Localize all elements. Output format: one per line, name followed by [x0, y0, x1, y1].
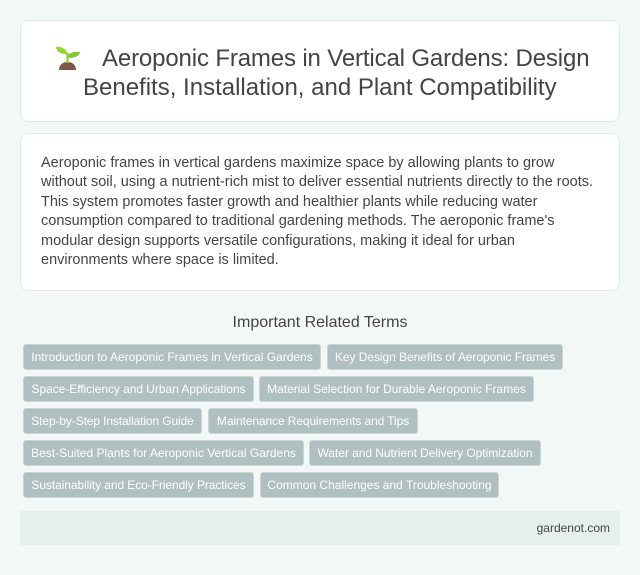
tag list: Material Selection for Durable Aeroponic Frames — [267, 382, 526, 396]
tag list — [23, 344, 563, 498]
tag list: Water and Nutrient Delivery Optimization — [318, 446, 532, 460]
text: summary paragraph: Aeroponic frames in vertical gardens maximize space by allowing plants to grow — [41, 155, 554, 171]
tag list: Best-Suited Plants for Aeroponic Vertical Gardens — [31, 446, 296, 460]
text: summary paragraph — [41, 155, 593, 268]
heading: related terms: Important Related Terms — [233, 314, 407, 331]
text: summary paragraph: consumption compared to traditional gardening methods. The aeroponic frame's — [41, 213, 555, 229]
panel: summary card — [20, 133, 620, 291]
tag list: Common Challenges and Troubleshooting — [267, 478, 492, 492]
footer source text: gardenot.com — [537, 521, 610, 535]
heading: title line 1: Aeroponic Frames in Vertical Gardens: Design — [102, 45, 589, 72]
tag list: Space-Efficiency and Urban Applications — [32, 382, 245, 396]
tag list: Step-by-Step Installation Guide — [31, 414, 194, 428]
tag list: Sustainability and Eco-Friendly Practices — [31, 478, 246, 492]
footer bar — [20, 511, 620, 545]
panel: title card — [20, 20, 620, 122]
tag list: Key Design Benefits of Aeroponic Frames — [335, 350, 555, 364]
text: summary paragraph: without soil, using a nutrient-rich mist to deliver essential nutrients directly to the roots. — [41, 174, 593, 190]
text: summary paragraph: modular design supports versatile configurations, making it ideal for urban — [41, 233, 515, 249]
icon: seedling — [56, 46, 80, 70]
tag list: Introduction to Aeroponic Frames in Vertical Gardens — [31, 350, 313, 364]
text: summary paragraph: environments where space is limited. — [41, 252, 279, 268]
heading: title line 2: Benefits, Installation, and Plant Compatibility — [83, 74, 557, 101]
tag list: Maintenance Requirements and Tips — [217, 414, 409, 428]
text: summary paragraph: This system promotes faster growth and healthier plants while reducing water — [41, 194, 537, 210]
